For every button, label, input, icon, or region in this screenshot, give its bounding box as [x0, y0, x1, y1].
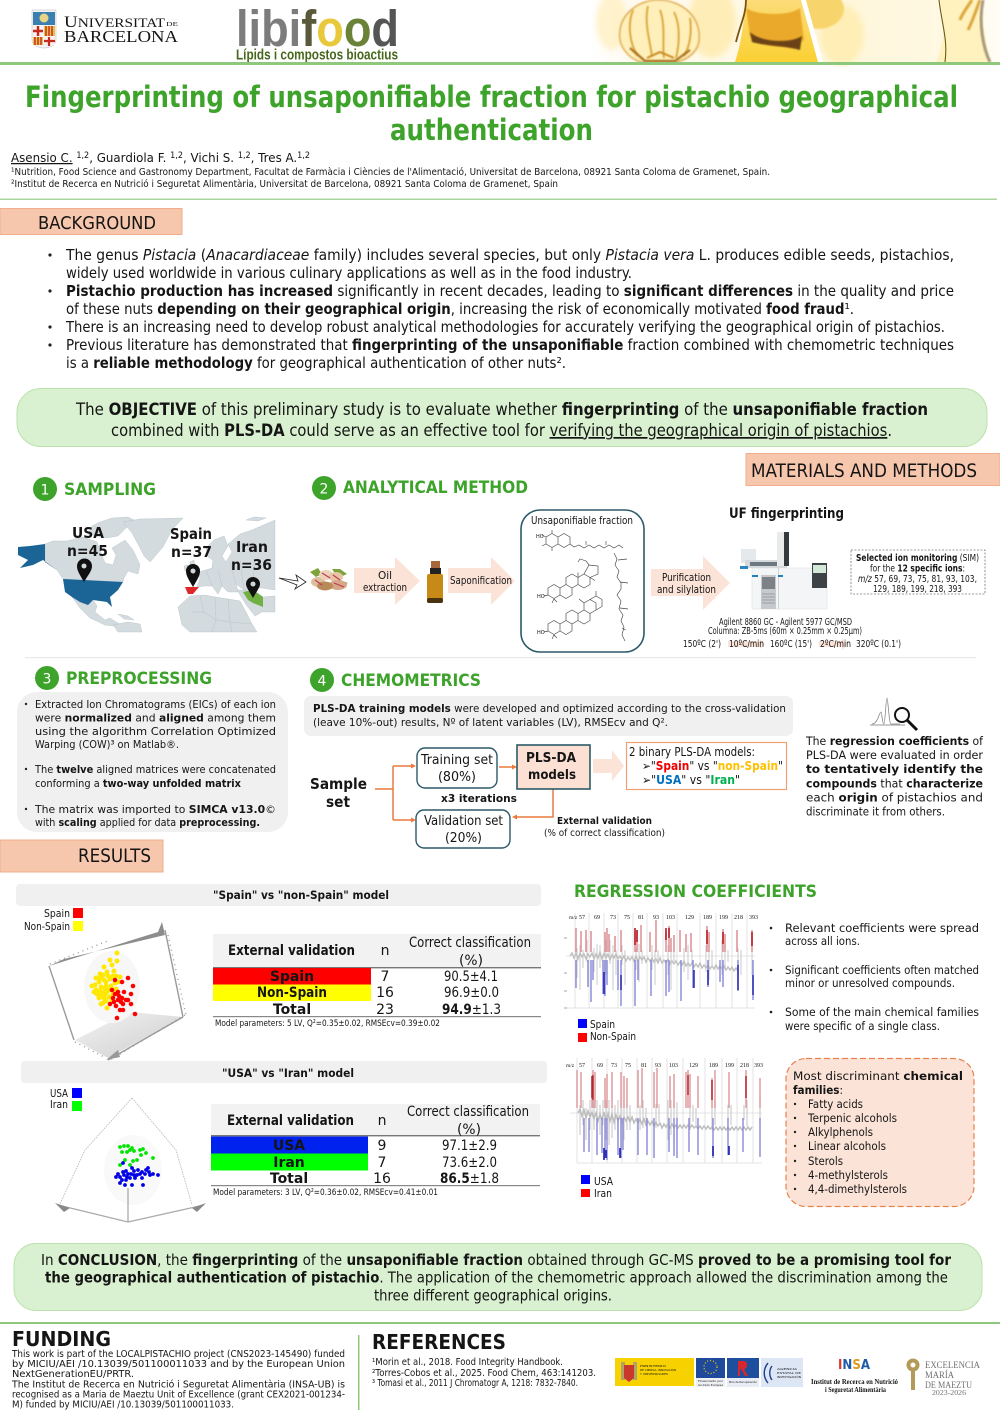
logo: Excelencia Maria de Maeztu: DE MAEZTU: [925, 1381, 972, 1391]
heading bar: [21, 1061, 547, 1083]
callout: chemical families: Terpenic alcohols: [807, 1111, 897, 1125]
chart: USA vs Iran regression coefficients: 75: [625, 1063, 631, 1069]
panel: references: ¹Morin et al., 2018. Food Integrity Handbook.: [372, 1357, 563, 1368]
panel: preprocessing: Warping (COW)³ on Matlab®.: [35, 738, 179, 751]
label: Iran n=36: [231, 538, 272, 574]
logo: INSA: Institut de Recerca en Nutrició: [811, 1378, 898, 1386]
panel: PLS-DA training note: (leave 10%-out) results, Nº of latent variables (LV), RMSEcv and Q².: [313, 716, 668, 729]
3D score plot: [49, 922, 186, 1060]
panel: USA vs Iran model: [21, 1061, 547, 1222]
molecules: [542, 530, 628, 641]
text block: regression coefficients note: The regression coefficients of: [805, 734, 984, 748]
temperature program: [683, 638, 901, 650]
chart: Spain regression coefficients: 75: [624, 915, 630, 921]
panel: unsaponifiable fraction: Unsaponifiable fraction: [531, 515, 633, 527]
box: validation set: (20%): [445, 831, 482, 846]
chart: USA vs Iran regression coefficients: 199: [725, 1063, 734, 1069]
arrow: purification and silylation: Purification: [662, 572, 711, 584]
heading: 4 chemometrics: [310, 668, 481, 692]
text block: regression coefficients note: to tentatively identify the: [806, 762, 983, 776]
arrow: purification and silylation: [651, 556, 730, 610]
legend: Iran: [50, 1099, 68, 1111]
header photo: oil glassware: [590, 0, 1000, 65]
legend: USA vs Iran regression: USA: [594, 1176, 614, 1188]
text block: regression coefficients note: discriminate it from others.: [806, 804, 945, 818]
chart: Spain regression coefficients: 393: [749, 915, 758, 921]
temperature program: 10ºC/min: [729, 639, 764, 650]
map pin: USA: [77, 558, 92, 582]
legend: [24, 908, 83, 933]
table: Spain external validation: 94.9±1.3: [442, 1002, 501, 1018]
table: USA external validation: 86.5±1.8: [440, 1171, 499, 1187]
logos: funding agencies: ESTATAL DE: [777, 1371, 801, 1375]
callout: objective: combined with PLS-DA could serve as an effective tool for verifying the geographical origin of pistachios.: [111, 421, 892, 441]
callout: conclusion: three different geographical origins.: [374, 1286, 612, 1304]
panel: funding: M) funded by MICIU/AEI /10.13039/501100011033.: [12, 1400, 234, 1410]
label: Spain n=37: n=37: [171, 543, 212, 561]
authors and affiliations: 1,2: [170, 151, 183, 161]
map pin: Spain: [186, 564, 200, 587]
logo: INSA: INSA: [838, 1358, 870, 1373]
panel: preprocessing: Extracted Ion Chromatograms (EICs) of each ion: [35, 698, 276, 711]
table: Spain external validation: 96.9±0.0: [444, 985, 499, 1001]
authors and affiliations: ²Institut de Recerca en Nutrició i Seguretat Alimentària, Universitat de Barcelona, 08921 Santa Coloma de Gramenet, Spain: [11, 178, 558, 190]
panel: funding: This work is part of the LOCALPISTACHIO project (CNS2023-145490) funded: [11, 1349, 345, 1360]
table: USA external validation: Model parameters: 3 LV, Q²=0.36±0.02, RMSEcv=0.41±0.01: [213, 1188, 438, 1198]
legend: USA vs Iran regression: Iran: [594, 1188, 612, 1200]
panel: unsaponifiable fraction: HO: [537, 630, 545, 636]
logos: funding agencies: DE CIENCIA, INNOVACIÓN: [640, 1367, 676, 1372]
arrow: purification and silylation: and silylation: [657, 584, 716, 596]
box: validation set: [416, 810, 510, 848]
table: Spain external validation: External validation: [228, 943, 355, 959]
arrow: saponification: [448, 557, 515, 605]
text block: regression findings: Significant coefficients often matched: [785, 963, 979, 977]
panel: references: REFERENCES: [372, 1330, 506, 1354]
arrow: oil extraction: [354, 557, 420, 605]
table: USA external validation: [211, 1104, 540, 1198]
map pin: Iran: [246, 577, 260, 598]
legend: USA: [50, 1088, 69, 1100]
heading: results: [0, 840, 163, 872]
table: USA external validation: USA: [273, 1138, 305, 1154]
callout: selected ion monitoring: [851, 550, 985, 595]
text block: background bullets: is a reliable methodology for geographical authentication of other nuts².: [66, 354, 566, 372]
box: PLS-DA models: PLS-DA: [526, 751, 576, 766]
box: PLS-DA models: [517, 745, 590, 789]
callout: selected ion monitoring: 129, 189, 199, 218, 393: [873, 584, 962, 595]
logos: funding agencies: Plan de Recuperación: [729, 1380, 757, 1384]
authors and affiliations: 1,2: [76, 151, 89, 161]
box: binary models: ➢"Spain" vs "non-Spain": [642, 759, 783, 773]
callout: chemical families: 4,4-dimethylsterols: [808, 1182, 907, 1196]
table: Spain external validation: Total: [273, 1002, 311, 1018]
text block: regression findings: across all ions.: [785, 934, 860, 948]
arrow: saponification: Saponification: [450, 575, 512, 587]
panel: funding: recognised as a Maria de Maeztu Unit of Excellence (grant CEX2021-001234-: [12, 1390, 345, 1400]
chart: USA vs Iran regression coefficients: 129: [689, 1063, 698, 1069]
label: Spain n=37: [170, 525, 212, 561]
text block: background bullets: widely used worldwide in various culinary applications as well as in the food industry.: [66, 264, 632, 282]
chart: Spain regression coefficients: 199: [719, 915, 728, 921]
text block: instrument details: [708, 617, 862, 637]
legend: Spain: [44, 908, 70, 920]
logo: Universitat de Barcelona: DE: [166, 22, 178, 28]
icon: amber bottle: [427, 561, 443, 603]
legend: Spain regression: [578, 1019, 636, 1043]
flow diagram: chemometric workflow: [310, 742, 786, 848]
text block: regression findings: were specific of a single class.: [785, 1019, 940, 1033]
box: validation set: Validation set: [424, 814, 503, 829]
arrow: to binary models: [593, 750, 624, 781]
panel: unsaponifiable fraction: [521, 510, 644, 652]
logo: INSA: i Seguretat Alimentària: [825, 1386, 886, 1394]
text block: regression findings: [770, 921, 979, 1033]
heading: regression coefficients: REGRESSION COEFFICIENTS: [574, 882, 817, 901]
table: Spain external validation: Non-Spain: [257, 985, 327, 1001]
authors and affiliations: 1,2: [238, 151, 251, 161]
authors and affiliations: , Guardiola F.: [89, 150, 170, 165]
chart: USA vs Iran regression coefficients: [566, 1058, 763, 1163]
logos: funding agencies: [615, 1358, 803, 1387]
logos: funding agencies: MINISTERIO: [640, 1364, 667, 1368]
label: external validation: (% of correct classification): [544, 828, 665, 839]
table: USA external validation: 73.6±2.0: [442, 1155, 497, 1171]
panel: PLS-DA training note: PLS-DA training models were developed and optimized according to the cross-validation: [313, 702, 786, 715]
panel: unsaponifiable fraction: HO: [536, 534, 544, 540]
text block: regression findings: Some of the main chemical families: [785, 1005, 979, 1019]
text block: regression coefficients note: compounds that characterize: [806, 776, 983, 790]
logo: Excelencia Maria de Maeztu: MARÍA: [925, 1369, 954, 1381]
chart: Spain regression coefficients: 81: [638, 915, 644, 921]
table: Spain external validation: (%): [459, 953, 483, 969]
chart: Spain regression coefficients: 129: [685, 915, 694, 921]
chart: USA vs Iran regression coefficients: 393: [754, 1063, 763, 1069]
callout: objective: The OBJECTIVE of this preliminary study is to evaluate whether fingerprinting of the unsaponifiable fraction: [75, 400, 928, 420]
arrow: oil extraction: extraction: [363, 582, 407, 594]
chart: Spain regression coefficients: 93: [653, 915, 659, 921]
heading bar: "Spain" vs "non-Spain" model: [213, 888, 389, 902]
heading bar: "USA" vs "Iran" model: [222, 1066, 354, 1080]
logos: funding agencies: Y UNIVERSIDADES: [640, 1372, 668, 1376]
heading: materials and methods: [746, 454, 1000, 486]
panel: preprocessing: using the algorithm Correlation Optimized: [35, 725, 276, 738]
heading: 4 chemometrics: CHEMOMETRICS: [341, 671, 481, 690]
chart: USA vs Iran regression coefficients: 81: [641, 1063, 647, 1069]
text block: background bullets: of these nuts depending on their geographical origin, increasing the risk of economically motivated food fraud¹.: [66, 300, 854, 318]
label: external validation: External validation: [557, 816, 652, 827]
callout: chemical families: 4-methylsterols: [808, 1168, 888, 1182]
callout: conclusion: In CONCLUSION, the fingerprinting of the unsaponifiable fraction obtained through GC-MS proved to be a promising tool for: [41, 1251, 952, 1269]
panel: preprocessing: The matrix was imported to SIMCA v13.0©: [34, 803, 276, 816]
heading: background: [0, 208, 182, 234]
table: Spain external validation: 23: [376, 1002, 394, 1018]
heading: 2 analytical method: 2: [320, 482, 328, 498]
text block: regression findings: minor or unresolved compounds.: [785, 976, 955, 990]
box: binary models: ➢"USA" vs "Iran": [642, 773, 740, 787]
icon: pistachios: [310, 568, 348, 590]
callout: chemical families: [786, 1058, 974, 1206]
temperature program: 150ºC (2'): [683, 639, 721, 650]
chart: Spain regression coefficients: 69: [594, 915, 600, 921]
legend: [50, 1088, 82, 1111]
text block: regression coefficients note: [805, 734, 984, 818]
label: sample set: [310, 775, 367, 811]
label: USA n=45: USA: [72, 524, 104, 542]
panel: funding: FUNDING: [12, 1327, 111, 1351]
box: training set: [417, 748, 497, 788]
temperature program: 160ºC (15'): [770, 639, 812, 650]
label: Iran n=36: n=36: [231, 556, 272, 574]
logo: Universitat de Barcelona: BARCELONA: [64, 27, 179, 46]
text block: background bullets: [48, 246, 954, 372]
authors and affiliations: 1,2: [297, 151, 310, 161]
map: sampling origins: [18, 517, 275, 632]
logo: Excelencia Maria de Maeztu: EXCELENCIA: [925, 1361, 980, 1371]
chart: USA vs Iran regression coefficients: 73: [611, 1063, 617, 1069]
box: binary models: 2 binary PLS-DA models:: [629, 745, 755, 759]
panel: funding: [11, 1327, 345, 1410]
panel: preprocessing: with scaling applied for data preprocessing.: [35, 816, 260, 829]
callout: conclusion: [14, 1244, 982, 1310]
authors and affiliations: ¹Nutrition, Food Science and Gastronomy Department, Facultat de Farmàcia i Ciències de l'Alimentació, Universitat de Barcelona, 08921 Santa Coloma de Gramenet, Spain.: [11, 166, 770, 178]
table: USA external validation: 16: [373, 1171, 391, 1187]
icon: hollow arrow: [279, 575, 306, 589]
callout: conclusion: the geographical authentication of pistachio. The application of the chemometric approach allowed the discrimination among the: [45, 1268, 948, 1286]
chart: Spain regression coefficients: [564, 913, 758, 1008]
callout: chemical families: Sterols: [808, 1154, 843, 1168]
callout: chemical families: Most discriminant chemical: [793, 1069, 963, 1083]
logo: Universitat de Barcelona: UNIVERSITAT: [64, 14, 165, 31]
chart: USA vs Iran regression coefficients: 103: [669, 1063, 678, 1069]
authors and affiliations: Asensio C.: [11, 150, 73, 165]
box: binary models: [626, 742, 786, 790]
logo: Excelencia Maria de Maeztu: 2023-2026: [932, 1388, 966, 1397]
label: Spain n=37: Spain: [170, 525, 212, 543]
chart: Spain regression coefficients: m/z: [569, 915, 578, 921]
legend: Non-Spain: [24, 921, 70, 933]
table: Spain external validation: Spain: [270, 969, 314, 985]
authors and affiliations: , Vichi S.: [183, 150, 238, 165]
callout: objective: [17, 388, 987, 446]
panel: preprocessing: were normalized and aligned among them: [35, 712, 276, 724]
label: sample set: set: [326, 793, 350, 811]
legend: USA vs Iran regression: [581, 1175, 614, 1200]
heading: 3 preprocessing: [35, 666, 212, 690]
panel: preprocessing: conforming a two-way unfolded matrix: [35, 777, 241, 790]
heading: 1 sampling: [33, 477, 156, 501]
label: USA n=45: [67, 524, 108, 560]
chart: USA vs Iran regression coefficients: 189: [709, 1063, 718, 1069]
chart: USA vs Iran regression coefficients: m/z: [566, 1063, 575, 1069]
authors and affiliations: [11, 150, 770, 190]
text block: regression coefficients note: PLS-DA were evaluated in order: [806, 748, 983, 762]
table: USA external validation: External validation: [227, 1113, 354, 1129]
box: training set: (80%): [438, 770, 476, 785]
panel: funding: by MICIU/AEI /10.13039/501100011033 and by the European Union: [12, 1359, 345, 1370]
label: Iran n=36: Iran: [236, 538, 268, 556]
3D score plot: [55, 1098, 206, 1222]
heading: 3 preprocessing: 3: [43, 672, 51, 688]
chart: USA vs Iran regression coefficients: 93: [655, 1063, 661, 1069]
panel: references: ³ Tomasi et al., 2011 J Chromatogr A, 1218: 7832-7840.: [372, 1378, 578, 1389]
chart: Spain regression coefficients: 103: [666, 915, 675, 921]
chart: Spain regression coefficients: 73: [610, 915, 616, 921]
heading: background: BACKGROUND: [38, 213, 156, 234]
heading: 1 sampling: SAMPLING: [64, 480, 156, 499]
table: Spain external validation: Correct classification: [409, 935, 531, 951]
logo: INSA: [811, 1358, 898, 1394]
heading: 4 chemometrics: 4: [318, 674, 327, 690]
header banner: [32, 0, 1000, 65]
logo: libifood: libifood: [236, 0, 399, 57]
table: USA external validation: 7: [378, 1155, 386, 1171]
heading: 2 analytical method: [312, 476, 528, 500]
authors and affiliations: , Tres A.: [251, 150, 297, 165]
title: authentication: [390, 113, 593, 147]
box: PLS-DA models: models: [528, 768, 576, 783]
box: training set: Training set: [420, 753, 493, 768]
table: Spain external validation: 90.5±4.1: [444, 969, 498, 985]
icon: chromatogram with magnifier: [870, 698, 917, 730]
callout: chemical families: families:: [793, 1083, 843, 1097]
text block: instrument details: Agilent 8860 GC - Agilent 5977 GC/MSD: [719, 617, 852, 628]
table: USA external validation: Iran: [273, 1155, 305, 1171]
panel: funding: The Institut de Recerca en Nutrició i Seguretat Alimentària (INSA-UB) is: [11, 1378, 345, 1390]
chart: Spain regression coefficients: 218: [734, 915, 743, 921]
text block: regression coefficients note: each origin of pistachios and: [806, 790, 983, 804]
panel: preprocessing: The twelve aligned matrices were concatenated: [34, 763, 276, 776]
text block: background bullets: Pistachio production has increased significantly in recent decades, leading to significant differences in the quality and price: [66, 282, 954, 300]
icon: GC-MS instrument: [740, 532, 827, 609]
heading: UF fingerprinting: UF fingerprinting: [729, 506, 844, 522]
callout: selected ion monitoring: for the 12 specific ions:: [870, 564, 965, 574]
chart: Spain regression coefficients: 57: [579, 915, 585, 921]
table: USA external validation: Total: [270, 1171, 308, 1187]
table: Spain external validation: 7: [381, 969, 389, 985]
callout: chemical families: Alkylphenols: [808, 1125, 873, 1139]
legend: Spain regression: Non-Spain: [590, 1031, 636, 1043]
panel: PLS-DA training note: [304, 696, 793, 736]
logos: funding agencies: Financiado por: [698, 1379, 724, 1383]
callout: selected ion monitoring: Selected ion monitoring (SIM): [856, 553, 979, 564]
logos: funding agencies: INVESTIGACIÓN: [777, 1374, 801, 1379]
callout: chemical families: Fatty acids: [808, 1097, 863, 1111]
table: Spain external validation: Model parameters: 5 LV, Q²=0.35±0.02, RMSEcv=0.39±0.02: [215, 1019, 440, 1029]
callout: chemical families: Linear alcohols: [808, 1139, 886, 1153]
logo: Universitat de Barcelona: [32, 10, 179, 48]
panel: unsaponifiable fraction: HO: [537, 594, 545, 600]
table: USA external validation: 9: [378, 1138, 386, 1154]
panel: Spain vs non-Spain model: [16, 884, 541, 1060]
text block: instrument details: Columna: ZB-5ms (60m × 0.25mm × 0.25µm): [708, 626, 862, 637]
logo: libifood: Lípids i compostos bioactius: [236, 46, 398, 64]
panel: references: ²Torres-Cobos et al., 2025. Food Chem, 463:141203.: [372, 1368, 596, 1379]
label: external validation: [544, 816, 665, 839]
legend: Spain regression: Spain: [590, 1019, 615, 1031]
panel: references: [372, 1330, 596, 1389]
table: USA external validation: n: [378, 1113, 386, 1129]
temperature program: 320ºC (0.1'): [856, 639, 901, 650]
table: Spain external validation: [213, 934, 541, 1029]
temperature program: 2ºC/min: [820, 639, 851, 650]
heading bar: [16, 884, 541, 906]
arrow: oil extraction: Oil: [378, 570, 392, 582]
table: USA external validation: 97.1±2.9: [442, 1138, 497, 1154]
title: [25, 80, 958, 147]
text block: regression findings: Relevant coefficients were spread: [785, 921, 979, 935]
label: x3 iterations: x3 iterations: [441, 792, 517, 805]
table: Spain external validation: 16: [376, 985, 394, 1001]
panel: preprocessing: [17, 692, 288, 832]
chart: Spain regression coefficients: 189: [703, 915, 712, 921]
icon: UB shield: [32, 10, 56, 48]
table: USA external validation: Correct classification: [407, 1104, 529, 1120]
heading: 1 sampling: 1: [41, 482, 49, 498]
logo: Excelencia Maria de Maeztu: [906, 1358, 980, 1397]
label: sample set: Sample: [310, 775, 367, 793]
table: USA external validation: (%): [457, 1122, 481, 1138]
heading: materials and methods: MATERIALS AND METHODS: [751, 460, 977, 482]
chart: USA vs Iran regression coefficients: 57: [579, 1063, 585, 1069]
arrows: flow connectors: [375, 764, 553, 822]
label: USA n=45: n=45: [67, 542, 108, 560]
chart: USA vs Iran regression coefficients: 69: [597, 1063, 603, 1069]
logos: funding agencies: AGENCIA: [777, 1367, 798, 1371]
heading: results: RESULTS: [78, 845, 151, 867]
heading: 2 analytical method: ANALYTICAL METHOD: [343, 478, 528, 497]
logos: funding agencies: la Unión Europea: [698, 1383, 723, 1387]
table: Spain external validation: n: [381, 943, 389, 959]
text block: background bullets: Previous literature has demonstrated that fingerprinting of the unsaponifiable fraction combined with chemometric techniques: [66, 336, 954, 354]
panel: funding: NextGenerationEU/PRTR.: [12, 1369, 134, 1380]
chart: USA vs Iran regression coefficients: 218: [740, 1063, 749, 1069]
heading: 3 preprocessing: PREPROCESSING: [66, 669, 212, 688]
text block: background bullets: The genus Pistacia (Anacardiaceae family) includes several species, but only Pistacia vera L. produces edible seeds, pistachios,: [65, 246, 954, 264]
